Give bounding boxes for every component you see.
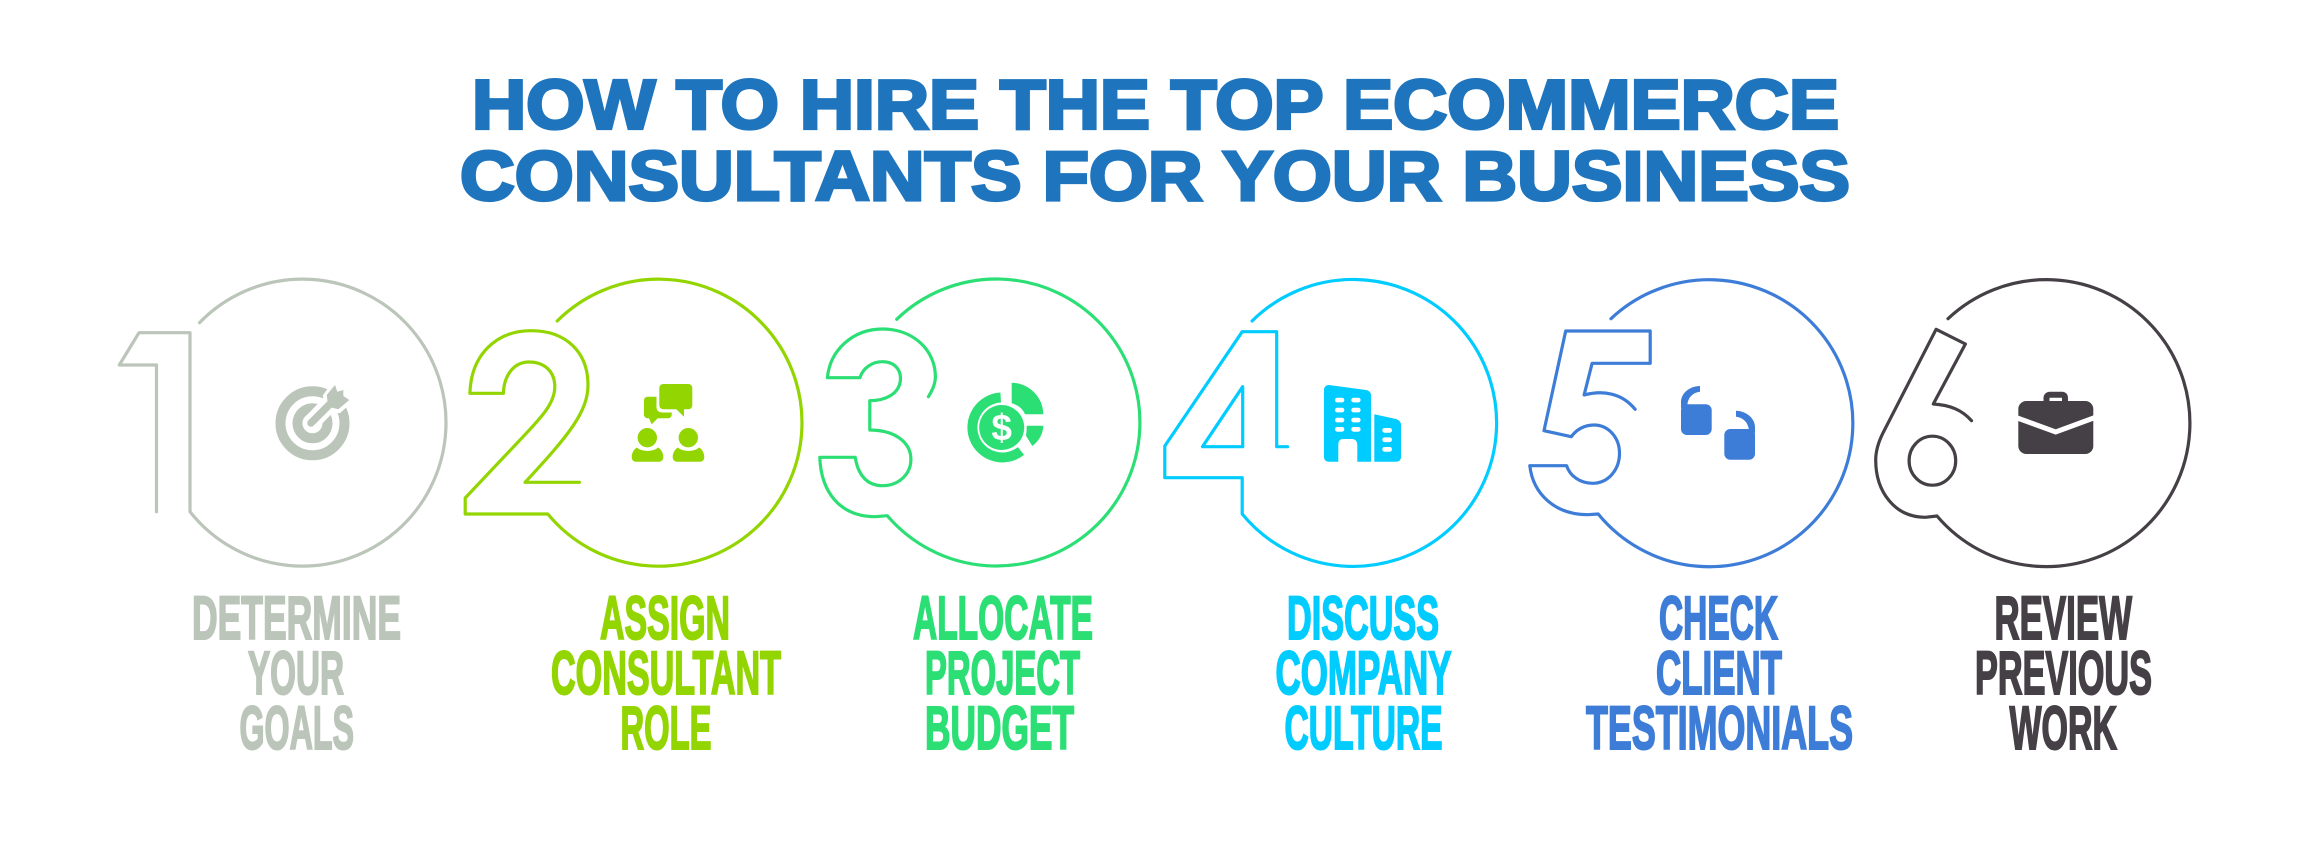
- step 4: discuss company culture: [1165, 279, 1497, 762]
- icon: office buildings: [1324, 385, 1401, 462]
- label: REVIEW: [1994, 584, 2132, 652]
- icon: dollar coin with pie chart: $: [991, 407, 1012, 448]
- label: ASSIGN: [600, 584, 730, 652]
- label: CULTURE: [1284, 694, 1442, 762]
- label: YOUR: [248, 639, 344, 707]
- step 5: check client testimonials: [1530, 280, 1853, 762]
- label: CONSULTANT: [551, 639, 781, 707]
- label: [1586, 584, 1853, 762]
- label: ALLOCATE: [913, 584, 1093, 652]
- label: [192, 584, 401, 762]
- label: PREVIOUS: [1975, 639, 2152, 707]
- number 5 and circle outline: [1530, 280, 1853, 567]
- label: [1276, 584, 1452, 762]
- step 2: assign consultant role: [465, 279, 802, 762]
- icon: dollar coin with pie chart: [972, 383, 1043, 457]
- label: ROLE: [620, 694, 712, 762]
- icon: target with dart: [280, 384, 350, 455]
- label: CHECK: [1659, 584, 1778, 652]
- label: [913, 584, 1093, 762]
- number 4 counter: [1202, 387, 1243, 447]
- number 4 and circle outline: [1165, 279, 1497, 566]
- title: HOW TO HIRE THE TOP ECOMMERCE: [472, 66, 1839, 144]
- label: PROJECT: [925, 639, 1080, 707]
- label: [551, 584, 781, 762]
- title: [460, 66, 1850, 215]
- label: DISCUSS: [1287, 584, 1439, 652]
- label: BUDGET: [925, 694, 1074, 762]
- label: DETERMINE: [192, 584, 401, 652]
- icon: two people with speech bubbles: [632, 381, 704, 462]
- icon: quotation marks: [1681, 386, 1755, 460]
- number 2 and circle outline: [465, 279, 802, 566]
- icon: briefcase: [2016, 395, 2095, 454]
- number 6 counter: [1909, 436, 1956, 485]
- number 1 and circle outline: [119, 279, 446, 566]
- step 1: determine your goals: [119, 279, 446, 762]
- number 3 and circle outline: [820, 279, 1140, 566]
- label: GOALS: [240, 694, 354, 762]
- label: COMPANY: [1276, 639, 1452, 707]
- label: WORK: [2010, 694, 2117, 762]
- title: CONSULTANTS FOR YOUR BUSINESS: [460, 137, 1850, 215]
- step 6: review previous work: [1876, 280, 2190, 762]
- label: CLIENT: [1656, 639, 1782, 707]
- label: TESTIMONIALS: [1586, 694, 1853, 762]
- step 3: allocate project budget: [820, 279, 1140, 762]
- number 6 and circle outline: [1876, 280, 2190, 567]
- label: [1975, 584, 2152, 762]
